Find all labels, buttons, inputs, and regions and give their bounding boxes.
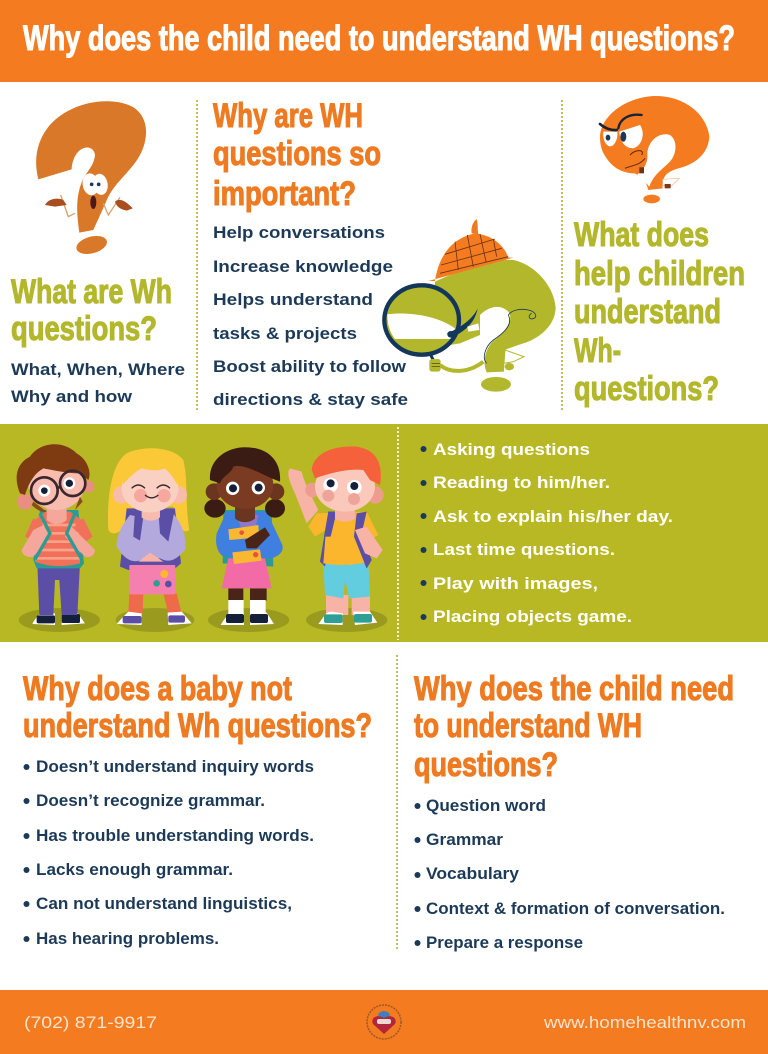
text: wh words: What, When, Where [11, 360, 185, 379]
heading: why does the child need to understand: to understand WH [414, 707, 642, 745]
text: reasons list: Increase knowledge [213, 257, 393, 276]
list: baby reasons: Lacks enough grammar. [36, 860, 233, 879]
heading: why does the child need to understand: questions? [414, 746, 558, 784]
list: baby reasons: Doesn’t understand inquiry words [36, 757, 314, 776]
heading: what does help children understand wh questions: What does [574, 216, 709, 254]
heading: what are wh questions [11, 273, 172, 348]
list: baby reasons: Has hearing problems. [36, 929, 219, 948]
list: what the child needs: Grammar [426, 830, 503, 849]
list: what helps children: Ask to explain his/her day. [433, 507, 673, 526]
header banner [0, 0, 768, 82]
text: wh words [11, 360, 185, 406]
text: reasons list: Helps understand [213, 290, 373, 309]
text: reasons list [213, 223, 408, 409]
list: baby reasons [24, 757, 314, 948]
heading: what are wh questions: What are Wh [11, 273, 172, 311]
list: what helps children: Reading to him/her. [433, 473, 610, 492]
icon: thinking orange question mark [600, 96, 709, 203]
list: baby reasons: Doesn’t recognize grammar. [36, 791, 265, 810]
list: what helps children: Play with images, [433, 574, 598, 593]
heading: why does a baby not understand: understand Wh questions? [23, 707, 372, 745]
heading: what does help children understand wh questions [574, 216, 745, 408]
list: what the child needs: Vocabulary [426, 864, 520, 883]
illustration: red-haired boy waving [288, 446, 387, 632]
list: what helps children: Placing objects game. [433, 607, 632, 626]
text: reasons list: directions & stay safe [213, 390, 408, 409]
heading: what are wh questions: questions? [11, 310, 157, 348]
heading: why does a baby not understand [23, 670, 372, 745]
footer bar [0, 990, 768, 1054]
panel: olive band with children [0, 424, 768, 642]
list: what the child needs [414, 796, 725, 952]
illustration: boy with glasses [17, 444, 100, 632]
heading: why does the child need to understand [414, 670, 734, 784]
text: reasons list: Help conversations [213, 223, 385, 242]
illustration: girl with books [204, 447, 289, 632]
list: what helps children [420, 440, 673, 626]
heading: why are wh questions so important: Why are WH [213, 97, 363, 135]
text: reasons list: tasks & projects [213, 324, 357, 343]
text: wh words: Why and how [11, 387, 133, 406]
heading: why are wh questions so important [213, 97, 381, 213]
list: baby reasons: Can not understand linguistics, [36, 894, 292, 913]
list: what the child needs: Context & formation of conversation. [426, 899, 725, 918]
heading: why are wh questions so important: important? [213, 175, 356, 213]
icon: detective question mark with magnifying glass [384, 219, 556, 392]
icon: surprised orange question mark [36, 101, 146, 257]
list: baby reasons: Has trouble understanding words. [36, 826, 314, 845]
phone number: (702) 871-9917 [24, 1013, 157, 1032]
list: what the child needs: Question word [426, 796, 546, 815]
illustration: blonde girl with pink bag [108, 448, 194, 632]
heading: what does help children understand wh questions: understand [574, 293, 721, 331]
heading: what does help children understand wh questions: questions? [574, 370, 719, 408]
website: www.homehealthnv.com [543, 1013, 746, 1032]
heading: why does a baby not understand: Why does a baby not [23, 670, 292, 708]
text: reasons list: Boost ability to follow [213, 357, 407, 376]
heading: what does help children understand wh questions: Wh- [574, 332, 621, 370]
list: what helps children: Last time questions. [433, 540, 615, 559]
icon: logo seal [367, 1005, 401, 1039]
list: what helps children: Asking questions [433, 440, 590, 459]
list: what the child needs: Prepare a response [426, 933, 583, 952]
heading: why are wh questions so important: questions so [213, 135, 381, 173]
